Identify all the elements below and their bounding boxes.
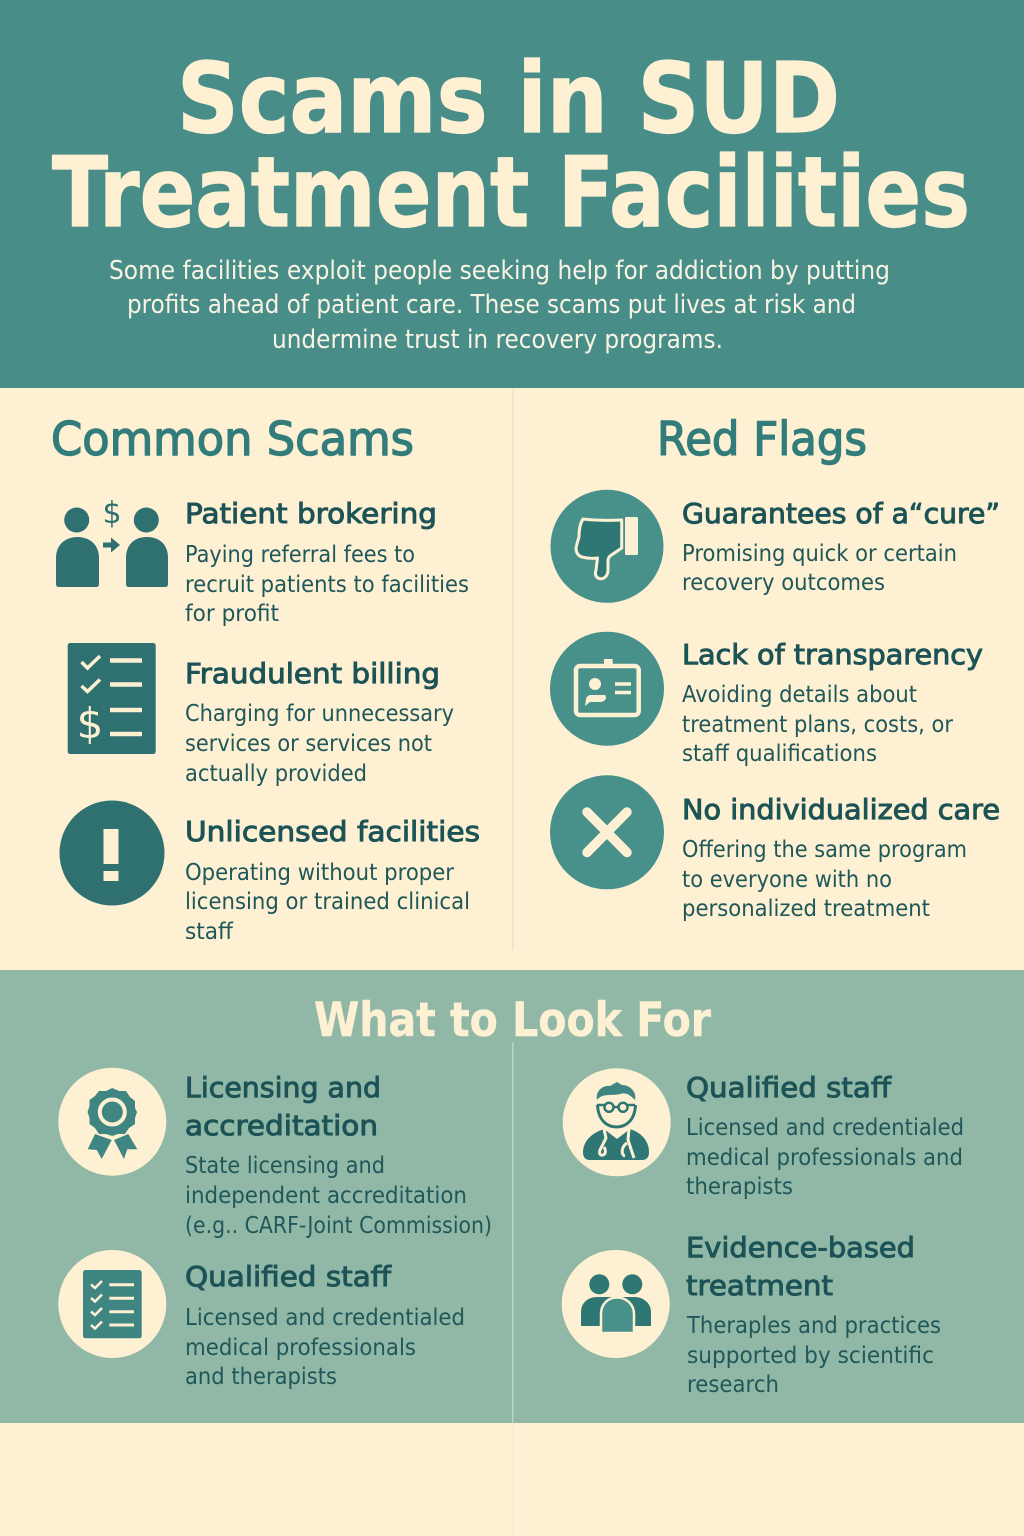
text: qualified staff right: therapists (686, 1174, 793, 1200)
text: patient brokering: Patient brokering (185, 497, 437, 530)
text: qualified staff left (185, 1260, 465, 1390)
icon: bill checklist: $ (77, 699, 103, 748)
text: no individualized care: No individualized care (682, 793, 1000, 826)
icon: group of people (562, 1250, 670, 1358)
text: patient brokering: recruit patients to facilities (185, 572, 469, 598)
text: unlicensed facilities: Operating without proper (185, 860, 454, 886)
text: guarantees (682, 497, 1000, 596)
heading: what to look for: What to Look For (314, 993, 712, 1048)
item: guarantees (550, 490, 1000, 603)
text: lack of transparency (682, 638, 983, 767)
text: evidence-based treatment: treatment (686, 1269, 833, 1302)
item: licensing and accreditation (58, 1068, 492, 1239)
panel: what to look for (0, 970, 1024, 1536)
text: unlicensed facilities: Unlicensed facilities (185, 815, 480, 848)
text: guarantees: recovery outcomes (682, 570, 885, 596)
icon: exclamation (60, 800, 164, 906)
text: qualified staff right: Qualified staff (686, 1071, 892, 1104)
text: fraudulent billing: Charging for unnecessary (185, 701, 454, 727)
text: fraudulent billing (185, 657, 454, 787)
text: evidence-based treatment: Evidence-based (686, 1231, 915, 1264)
item: evidence-based treatment (562, 1231, 941, 1398)
icon: document checklist (58, 1250, 166, 1358)
text: fraudulent billing: Fraudulent billing (185, 657, 440, 690)
icon: people exchanging money (56, 496, 168, 587)
text: guarantees: Guarantees of a“cure” (682, 497, 1000, 530)
text: lack of transparency: staff qualifications (682, 741, 877, 767)
text: lack of transparency: Avoiding details about (682, 682, 917, 708)
item: qualified staff right (563, 1068, 964, 1200)
text: evidence-based treatment: research (687, 1372, 779, 1398)
text: qualified staff right: Licensed and credentialed (686, 1115, 964, 1141)
item: no individualized care (550, 775, 1000, 922)
icon: people exchanging money: $ (102, 496, 122, 531)
text: lack of transparency: treatment plans, costs, or (682, 712, 953, 738)
heading: common scams: Common Scams (51, 412, 414, 466)
intro text: undermine trust in recovery programs. (272, 325, 723, 355)
panel: header (0, 0, 1024, 388)
text: fraudulent billing: actually provided (185, 761, 367, 787)
icon: award rosette (58, 1068, 166, 1176)
icon: x mark (550, 775, 664, 889)
text: qualified staff left: medical professionals (185, 1335, 416, 1361)
text: unlicensed facilities: licensing or trained clinical (185, 889, 470, 915)
icon: thumbs down (550, 490, 664, 603)
text: unlicensed facilities: staff (185, 919, 234, 945)
text: qualified staff left: Licensed and credentialed (185, 1305, 465, 1331)
text: evidence-based treatment: supported by scientific (687, 1343, 934, 1369)
text: guarantees: Promising quick or certain (682, 541, 957, 567)
text: no individualized care: to everyone with no (682, 867, 892, 893)
text: patient brokering: for profit (185, 601, 279, 627)
item: unlicensed facilities (60, 800, 480, 945)
title: Scams in SUD (177, 42, 840, 155)
icon: doctor (563, 1068, 671, 1176)
text: fraudulent billing: services or services not (185, 731, 432, 757)
intro text (109, 256, 890, 355)
text: licensing and accreditation (185, 1071, 492, 1239)
intro text: Some facilities exploit people seeking help for addiction by putting (109, 256, 890, 286)
text: no individualized care: Offering the same program (682, 837, 967, 863)
panel: common scams (51, 412, 480, 945)
text: evidence-based treatment: Theraples and practices (686, 1313, 941, 1339)
text: patient brokering: Paying referral fees to (185, 542, 415, 568)
text: qualified staff left: Qualified staff (185, 1260, 392, 1293)
text: licensing and accreditation: independent accreditation (185, 1183, 467, 1209)
text: licensing and accreditation: Licensing and (185, 1071, 381, 1104)
heading: red flags: Red Flags (657, 412, 867, 466)
item: qualified staff left (58, 1250, 465, 1390)
item: patient brokering (56, 496, 469, 627)
text: no individualized care (682, 793, 1000, 922)
text: lack of transparency: Lack of transparency (682, 638, 983, 671)
icon: id badge (550, 632, 664, 746)
text: licensing and accreditation: (e.g.. CARF-Joint Commission) (185, 1213, 492, 1239)
text: no individualized care: personalized treatment (682, 896, 930, 922)
item: fraudulent billing (68, 643, 454, 787)
text: licensing and accreditation: accreditation (185, 1109, 378, 1142)
text: qualified staff left: and therapists (185, 1364, 337, 1390)
panel: red flags (550, 412, 1000, 922)
text: qualified staff right: medical professionals and (686, 1145, 963, 1171)
icon: bill checklist (68, 643, 156, 754)
text: unlicensed facilities (185, 815, 480, 945)
text: qualified staff right (686, 1071, 964, 1200)
item: lack of transparency (550, 632, 983, 767)
title (52, 42, 970, 249)
text: licensing and accreditation: State licensing and (185, 1153, 385, 1179)
intro text: profits ahead of patient care. These scams put lives at risk and (127, 290, 856, 320)
text: evidence-based treatment (686, 1231, 941, 1398)
text: patient brokering (185, 497, 469, 627)
